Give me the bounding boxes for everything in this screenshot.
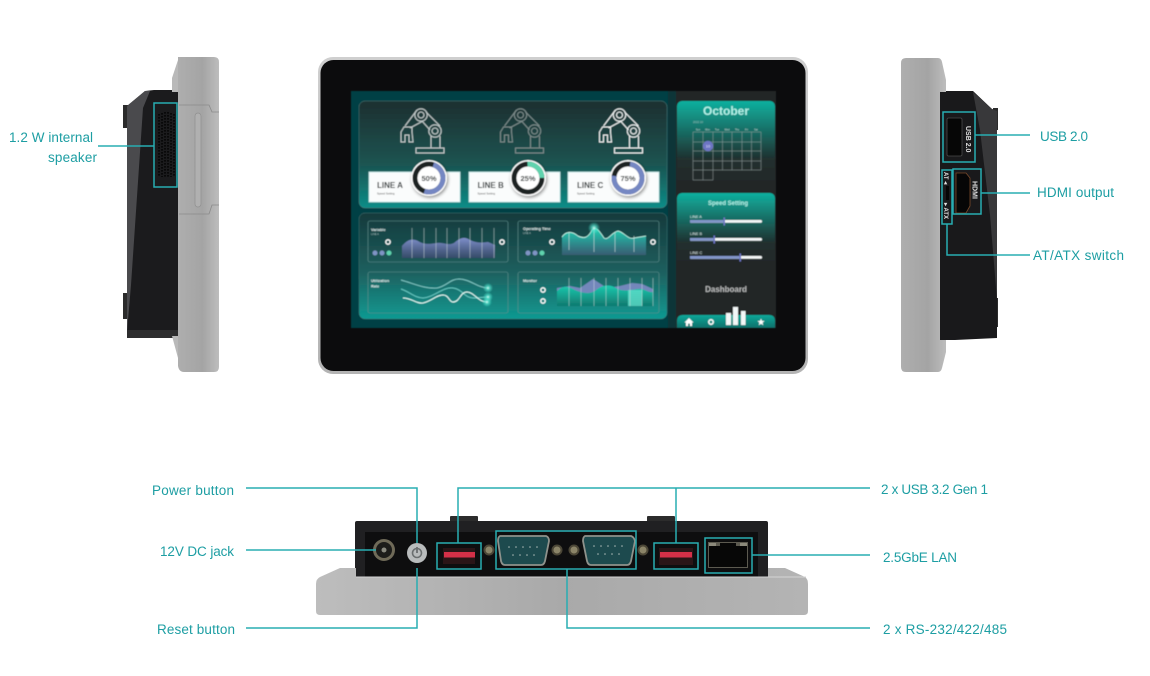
aluminium frame [178, 57, 219, 372]
rear housing [940, 91, 997, 340]
panel: calendar: Wed [724, 128, 730, 132]
navigation bar [677, 307, 775, 328]
chart: variable [371, 228, 504, 258]
panel: calendar: October [703, 104, 749, 118]
panel: calendar: 2022.10 [693, 120, 704, 124]
panel: speed setting [677, 193, 775, 269]
aluminium frame [316, 568, 808, 615]
screws [484, 546, 648, 554]
switch: AT/ATX [942, 172, 949, 219]
icon: robot arm A [401, 109, 444, 153]
chart: variable: Variable [371, 228, 386, 232]
port: HDMI: HDMI [970, 181, 978, 199]
callout: power button: Power button [152, 483, 234, 498]
port: USB 3.2 right [659, 548, 693, 565]
card: line B: 25% [520, 174, 536, 183]
callout: 12V DC jack: 12V DC jack [160, 544, 234, 559]
card: line A: LINE A [377, 181, 403, 190]
callout: HDMI output [953, 169, 1114, 214]
chart: variable: LINE A [371, 233, 379, 236]
panel: speed setting: Speed Setting [708, 201, 748, 207]
callout: 2 x USB 3.2 Gen 1 [437, 482, 988, 569]
panel: speed setting: LINE B [690, 232, 702, 236]
aluminium frame [901, 58, 946, 372]
callout: USB 2.0 [943, 112, 1088, 162]
panel: calendar: Thu [735, 128, 740, 132]
mounting tabs [450, 516, 675, 522]
icon: home [684, 318, 694, 326]
icon: star [758, 318, 764, 325]
callout: AT/ATX switch [942, 170, 1124, 263]
port: serial 1 [498, 536, 549, 565]
panel: speed setting: LINE C [690, 251, 702, 255]
chart: utilization rate [371, 279, 493, 307]
callout: reset button [157, 568, 417, 637]
panel: calendar: Fri [745, 128, 748, 132]
switch: AT/ATX: AT ◂ [942, 172, 948, 185]
icon: robot arm C [600, 109, 642, 153]
card: line B [469, 160, 560, 202]
callout: reset button: Reset button [157, 622, 235, 637]
mounting clips [993, 108, 998, 327]
card: line C [568, 160, 659, 202]
screen dashboard [351, 91, 776, 328]
callout: 2.5GbE LAN: 2.5GbE LAN [883, 550, 957, 565]
card: line B: LINE B [478, 181, 504, 190]
port: USB 3.2 left [443, 548, 475, 564]
chart: utilization rate: Utilization [371, 279, 390, 283]
callout: 1.2 W internal speaker [9, 103, 177, 187]
speaker grille [159, 112, 174, 178]
callout: HDMI output: HDMI output [1037, 185, 1114, 200]
card: line C: 75% [620, 174, 636, 183]
port: USB 2.0 [947, 118, 971, 156]
mounting clips [123, 105, 128, 319]
front view of panel [318, 57, 808, 374]
rear housing [355, 521, 768, 578]
port: LAN [708, 542, 748, 568]
callout: 1.2 W internal speaker: speaker [48, 150, 98, 165]
panel: calendar: Tue [715, 128, 720, 132]
card: line A [369, 160, 460, 202]
icon: robot arm B [500, 109, 544, 153]
panel: calendar: 10 [706, 144, 711, 148]
panel: calendar: Sun [696, 128, 701, 132]
panel: production lines [359, 101, 667, 208]
chart: monitor: Monitor [523, 279, 537, 283]
panel: charts [359, 213, 667, 319]
panel: calendar [677, 101, 775, 190]
switch: AT/ATX: ▸ ATX [942, 202, 948, 219]
callout: 2 x RS-232/422/485 [496, 531, 1007, 637]
port: HDMI [956, 173, 978, 213]
card: line B: Speed Setting [478, 192, 496, 196]
callout: 2 x RS-232/422/485: 2 x RS-232/422/485 [883, 622, 1007, 637]
rear housing [127, 90, 180, 338]
bezel [318, 57, 808, 374]
icon: settings [709, 320, 713, 324]
callout: AT/ATX switch: AT/ATX switch [1033, 248, 1124, 263]
chart: utilization rate: Rate [371, 284, 379, 288]
card: line C: Speed Setting [577, 192, 595, 196]
callout: 2.5GbE LAN [705, 538, 957, 573]
callout: power button [152, 483, 417, 543]
icon: bar chart [726, 307, 746, 325]
card: line C: LINE C [577, 181, 603, 190]
panel: calendar: Mon [705, 128, 711, 132]
chart: operating time: Operating Time [523, 227, 551, 231]
chart: monitor [523, 278, 653, 306]
port: serial 2 [583, 536, 635, 565]
port: DC jack [373, 539, 395, 561]
power button [407, 543, 427, 563]
panel: calendar: Sat [754, 128, 758, 132]
heading: dashboard: Dashboard [705, 285, 747, 294]
card: line A: Speed Setting [377, 192, 395, 196]
callout: 1.2 W internal speaker: 1.2 W internal [9, 130, 93, 145]
bottom view of device [316, 516, 808, 615]
panel: speed setting: LINE A [690, 215, 702, 219]
callout: 2 x USB 3.2 Gen 1: 2 x USB 3.2 Gen 1 [881, 482, 988, 497]
card: line A: 50% [421, 174, 437, 183]
right side view of device [901, 58, 998, 372]
chart: operating time [523, 222, 655, 256]
port: USB 2.0: USB 2.0 [964, 126, 971, 153]
callout: USB 2.0: USB 2.0 [1040, 129, 1088, 144]
left side view of device [123, 57, 219, 372]
chart: operating time: LINE A [523, 232, 531, 235]
side bracket [179, 105, 219, 214]
